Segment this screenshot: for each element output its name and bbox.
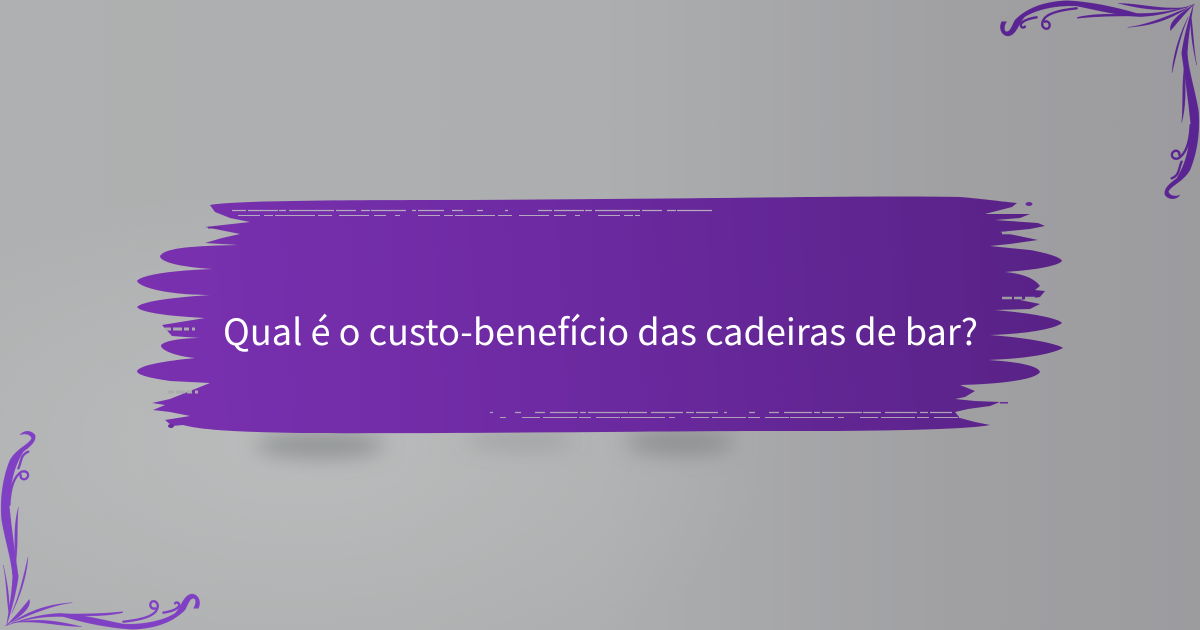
title: Qual é o custo-benefício das cadeiras de bar? [223, 304, 978, 356]
purple brush-stroke banner [137, 196, 1063, 433]
ornament: top-right corner [1000, 1, 1199, 199]
banner shadow [255, 429, 735, 458]
ornament: bottom-left corner [1, 431, 200, 629]
paint specks [168, 202, 1032, 428]
dry-brush streaks [165, 210, 1038, 418]
